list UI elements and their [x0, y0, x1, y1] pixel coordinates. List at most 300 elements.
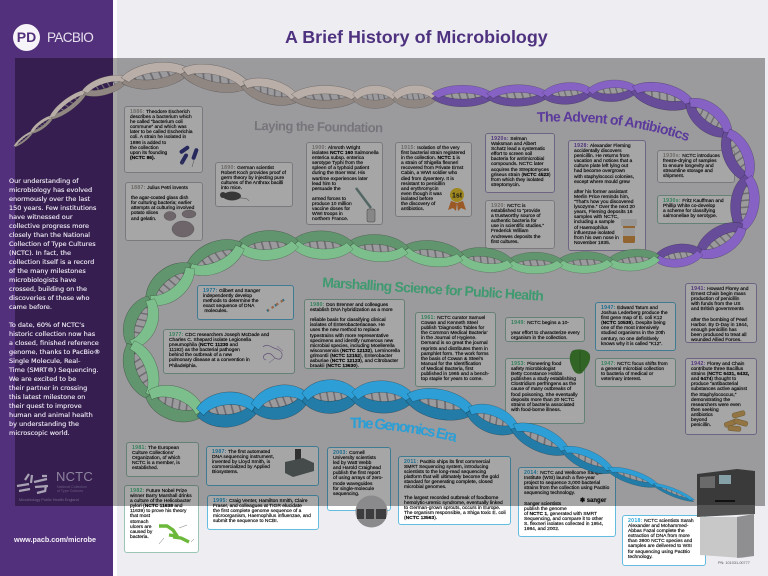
card: 1928 Fleming: penicillin. He returns from	[574, 154, 629, 159]
card: 1995 Venter: submit the sequence to NCBI.	[213, 519, 278, 524]
card: 1961 Cowan and Steel: the basis of Cowan & Steel’s	[421, 357, 483, 362]
logo: NCTC: National Collection	[57, 485, 87, 489]
card: 1982 Marshall: caused by	[130, 530, 152, 535]
card: 1920s Waksman: Waksman and Albert	[491, 142, 536, 147]
intro paragraph: Our understanding of	[9, 176, 79, 184]
card: 2014 Sanger: Institute (WSI) launch a five-year	[524, 476, 595, 481]
card: 1890 Koch: into mice.	[221, 186, 242, 191]
card: 1977 Gilbert and Sanger	[197, 285, 294, 320]
card: 1977 CDC Legionella: 1977: CDC researchers Joseph McDade and	[169, 332, 269, 338]
card: 1941 Florey and Chain: Ernest Chain begin mass	[691, 292, 746, 297]
card: 1900 Wright: armed forces to	[312, 197, 346, 202]
card: 1947 Tatum and Lederberg: first gene map of E. coli K12	[601, 316, 662, 321]
card: 1900 Wright: WWI troops in	[312, 212, 343, 217]
card: 1900 Wright: vaccine doses for	[312, 207, 350, 212]
card: 1915 first strain	[395, 142, 472, 217]
card: 2011 PacBio: SMRT Sequencing system, introducing	[404, 465, 488, 470]
card: 1947 Tatum and Lederberg: 1947: Edward Tatum and	[601, 305, 658, 311]
card: 1915 first strain: a strain of Shigella flexneri	[401, 161, 458, 166]
icon: zero-mode waveguide circle	[356, 496, 388, 528]
card: 2003 Craighead: and Harold Craighead	[333, 466, 381, 471]
card: 1890 Koch: germ theory by injecting pure	[221, 176, 284, 181]
card: 1928 Fleming: of Haemophilus	[574, 226, 608, 230]
card: 1886 Escherich: (NCTC 86).	[130, 156, 155, 161]
card: 1928 Fleming: except where mould grew	[574, 180, 630, 185]
card: 1915 first strain: antibiotics.	[401, 207, 424, 212]
logo: PacBio	[13, 24, 94, 51]
card: 1961 Cowan and Steel: reprints and distributes them in	[421, 347, 488, 352]
card: 1900 Wright: during the Boer War. His	[312, 171, 365, 176]
card: 1920s Waksman: from which they isolated	[491, 178, 543, 183]
card: 1947 Tatum and Lederberg	[595, 302, 676, 351]
card: 1987 instrument: commercialized by Applied	[212, 465, 270, 470]
card: 1980 Brenner	[304, 299, 405, 369]
card: 1995 Venter: microorganism, Haemophilus influenzae, and	[213, 514, 311, 519]
intro paragraph: have witnessed our	[9, 212, 73, 220]
card: 1930s Kauffman: 1930s: Fritz Kauffman and	[663, 198, 724, 204]
card: 1930 NCTC established: use in scientific studies.”	[491, 224, 544, 229]
card: 1928 Fleming: vacation and notices that a	[574, 159, 632, 164]
card: 1987 instrument: DNA sequencing instrument,	[212, 455, 274, 460]
card: 1886 Escherich: upon its founding	[130, 151, 167, 156]
card: 1930s freeze-drying: shipment.	[663, 174, 684, 179]
card: 1886 Escherich	[124, 106, 203, 173]
card: 2018: for sequencing using PacBio	[628, 550, 690, 555]
card: 2014 Sanger: S. flexneri isolates collected in 1954,	[524, 522, 603, 527]
card: 1947 Tatum and Lederberg: Joshua Lederberg produce the	[601, 311, 668, 316]
card: 1961 Cowan and Steel: Cowan and Kenneth Steel	[421, 321, 478, 326]
card: 1947 Tatum and Lederberg: studied organisms in the 20th	[601, 331, 665, 336]
card: 1928 Fleming: from his own nose in	[574, 236, 619, 241]
heading: Marshalling Science for Public Health: Marshalling Science for Public Health	[322, 278, 543, 301]
card: 1942 Florey and Chain: substances active against	[691, 387, 747, 392]
card: 2014 Sanger: Sequencing, and compare it to other	[524, 517, 603, 522]
icon: pill bottle	[621, 219, 637, 243]
card: 1949: year effort to characterize every	[511, 331, 580, 336]
card: 1941 Florey and Chain: wounded Allied Forces.	[691, 338, 742, 343]
card: 1930s freeze-drying: 1930s: NCTC introduces	[663, 153, 720, 159]
card: 1980 Brenner: uses the new method to replace	[310, 328, 379, 333]
card: 2014 Sanger: Sanger scientists	[524, 502, 561, 507]
card: 1915 first strain: Cabin, a WWI soldier who	[401, 171, 457, 176]
card: 1941 Florey and Chain: 1941: Howard Florey and	[691, 286, 748, 292]
card: 1942 Florey and Chain	[685, 358, 757, 435]
card: 1928 Fleming: lysozyme.” Over the next 20	[574, 205, 635, 210]
card: 1987 instrument	[206, 446, 319, 486]
card: 1890 Koch: cultures of the Anthrax bacilli	[221, 181, 283, 186]
icon: first place medal: 1st	[452, 192, 463, 200]
intro paragraph: enormously over the last	[9, 194, 90, 202]
card: 1947 NCTC focus	[595, 358, 676, 387]
intro paragraph	[9, 176, 96, 310]
card: 2014 Sanger: sequencing technology.	[524, 491, 575, 496]
card: 1930s freeze-drying: to ensure longevity and	[663, 164, 714, 169]
card: 1915 first strain: 1915: Isolation of the very	[401, 145, 460, 151]
second paragraph: Single Molecule, Real-	[9, 357, 80, 365]
card: 1982 Marshall: bacteria.	[130, 535, 149, 540]
card: 1980 Brenner: grimontii (NCTC 12152), Enterobacter	[310, 354, 392, 359]
card: 1930 NCTC established: first cultures.	[491, 240, 519, 245]
card: 1961 Cowan and Steel: published in 1965 and a bench-	[421, 372, 489, 377]
card: 1980 Brenner: braakii (NCTC 13630).	[310, 364, 359, 369]
card: 1900 Wright: wartime experiences later	[312, 177, 368, 182]
card: 1953 Hobbs: safety microbiologist	[511, 367, 555, 372]
logo: NCTC	[16, 469, 93, 502]
card: 2003 Craighead: 2003: Cornell	[333, 450, 365, 456]
card: 1961 Cowan and Steel: in the Journal of Hygiene.	[421, 336, 476, 341]
card: 2003 Craighead: sequencing.	[333, 492, 359, 497]
logo: PacBio: PD	[17, 29, 36, 45]
card: 1928 Fleming	[568, 140, 646, 251]
card: 1930 NCTC established: Andrewes deposits the	[491, 235, 540, 240]
card: 1930s Kauffman: Phillip White co-develop	[663, 204, 715, 209]
card: 1930s freeze-drying: streamline storage and	[663, 169, 713, 174]
card: 1900 Wright: isolates NCTC 160 Salmonella	[312, 151, 379, 156]
second paragraph: their quest to improve	[9, 402, 82, 410]
card: 1949	[505, 317, 585, 342]
card: 1928 Fleming: after his former assistant	[574, 190, 628, 195]
left purple panel	[0, 0, 113, 576]
intro paragraph: came before.	[9, 302, 52, 310]
card: 1947 Tatum and Lederberg: knows why it is called “K12”.	[601, 342, 662, 347]
card: 2014 Sanger: 2014: NCTC and Wellcome Sanger	[524, 470, 603, 476]
card: 1980 Brenner: establish DNA hybridization as a more	[310, 308, 393, 313]
card: 1890 Koch	[215, 162, 293, 207]
card: 1890 Koch: 1890: German scientist	[221, 165, 274, 171]
intro paragraph: 150 years. Few institutions	[9, 204, 96, 212]
icon: spinach leaf	[570, 349, 590, 374]
second paragraph: their partner in crossing	[9, 384, 87, 392]
card: 1953 Hobbs: deposits more than 20 NCTC	[511, 398, 574, 403]
intro paragraph: (NCTC). In fact, the	[9, 248, 71, 256]
card: 1953 Hobbs: Betty Constance Hobbs	[511, 372, 562, 377]
second paragraph: microscopic world.	[9, 429, 70, 437]
dimming overlay rectangle	[14, 58, 764, 506]
card: 1886 Escherich: commune” and which was	[130, 125, 187, 130]
card: 1928 Fleming: “That’s how you discovered	[574, 200, 633, 205]
icon: petri dishes	[164, 210, 196, 238]
intro paragraph: of the many milestones	[9, 266, 86, 274]
card: 1928 Fleming: accidentally discovers	[574, 149, 622, 154]
card: 1947 Tatum and Lederberg: (NCTC 10538). Despite being	[601, 321, 665, 326]
card: 1941 Florey and Chain: enough penicillin has	[691, 328, 737, 333]
intro paragraph: discoveries of those who	[9, 294, 90, 302]
card: 2018: than 3800 NCTC species and	[628, 539, 692, 544]
icon: DNA bases	[266, 298, 285, 312]
card: 2018: extraction of DNA from more	[628, 534, 690, 539]
card: 1920s Waksman: acquires the Streptomyces	[491, 168, 549, 173]
card: 1886 Escherich: coli. A strain he isolated in	[130, 135, 186, 140]
card: 1987 instrument: Biosystems.	[212, 470, 238, 475]
second paragraph: a closed, finished reference	[9, 339, 99, 347]
card: 1928 Fleming: had become overgrown	[574, 169, 625, 174]
card: 1928 Fleming: 1928: Alexander Fleming	[574, 143, 631, 149]
card: 1980 Brenner: typestrains with more representative	[310, 334, 389, 339]
card: 1980 Brenner: isolates of Enterobacteriaceae. He	[310, 323, 385, 328]
logo: NCTC: NCTC	[56, 469, 93, 484]
card: 1980 Brenner: 1980: Don Brenner and colleagues	[310, 302, 388, 308]
icon: sequencing instrument	[285, 449, 314, 477]
card: 1977 CDC Legionella: 11192) as the bacterial pathogen	[169, 348, 240, 353]
card: 1928 Fleming: culture plate left lying out	[574, 164, 628, 169]
icon: syringe and vial	[355, 187, 376, 222]
card: 2014 Sanger: of NCTC 1, generated with SMRT	[524, 512, 597, 517]
card: 2014 Sanger: 1984, and 2002.	[524, 527, 559, 532]
card: 1987 instrument: invented by Lloyd Smith, is	[212, 460, 270, 465]
card: 1980 Brenner: microbial species, including Moellerella	[310, 344, 395, 349]
card: 1980 Brenner: asburiae (NCTC 12123), and Citrobacter	[310, 359, 398, 364]
card: 2003 Craighead: of using arrays of zero-	[333, 476, 383, 481]
second paragraph: historic collection now has	[9, 330, 95, 338]
card: 1886 Escherich: describes a bacterium which	[130, 115, 192, 120]
icon: bacillus rods	[724, 410, 748, 432]
title: A Brief History of Microbiology	[285, 27, 548, 47]
card: 1941 Florey and Chain: production of penicillin	[691, 297, 739, 302]
card: 2018: Alexander and Mohammed-	[628, 524, 688, 529]
card: 2003 Craighead: mode waveguides	[333, 482, 372, 487]
second paragraph: To date, 60% of NCTC’s	[9, 321, 85, 329]
helix: purple antibiotics strand	[432, 77, 762, 270]
card: 2014 Sanger: project to sequence 3,000 bacterial	[524, 481, 600, 486]
card: 1886 Escherich: 1886: Theodore Escherich	[130, 109, 190, 115]
card: 1942 Florey and Chain: the Staphylococcus,”	[691, 393, 736, 398]
card: 1930 NCTC established: 1920: NCTC is	[491, 203, 526, 209]
card: 1920s Waksman: effort to screen soil	[491, 152, 532, 157]
intro paragraph: Collection of Type Cultures	[9, 240, 96, 248]
card: 2011 PacBio: hemolytic-uremic syndrome, eventually linked	[404, 501, 503, 506]
card: 1981 ECCO: Culture Collections’	[132, 451, 174, 456]
card: 1953 Hobbs: cause of many outbreaks of	[511, 387, 571, 392]
card: 2018: 2018: NCTC scientists Sarah	[628, 518, 694, 524]
card: 1953 Hobbs: strains of bacteria associated	[511, 403, 574, 408]
helix: green public health strand	[116, 229, 661, 429]
second paragraph: by understanding the	[9, 420, 79, 428]
card: 1942 Florey and Chain: and 6474) thought to	[691, 377, 736, 382]
card: 1949: 1949: NCTC begins a 10-	[511, 320, 569, 326]
icon: final sequencing instrument	[697, 469, 755, 558]
card: 1953 Hobbs: publishes a study establishing	[511, 377, 576, 382]
card: 1930 NCTC established: Frederick William	[491, 229, 528, 234]
card: 1930s Kauffman: salmonellae by serotype.	[663, 214, 717, 219]
card: 1928 Fleming: November 1935.	[574, 241, 610, 246]
card: 1915 first strain: recovered from Private Ernst	[401, 166, 463, 171]
card: 1915 first strain: resistant to penicillin	[401, 182, 445, 187]
card: 1941 Florey and Chain: and British governments	[691, 307, 744, 312]
helix: blue genomics strand	[195, 379, 696, 505]
card: 1977 Gilbert and Sanger: independently develop	[203, 294, 252, 299]
card: 2011 PacBio: microbial genomes.	[404, 485, 446, 490]
card: 1941 Florey and Chain: been produced to treat all	[691, 333, 746, 338]
second paragraph	[8, 321, 100, 437]
card: 1981 ECCO: NCTC is a member, is	[132, 461, 180, 466]
card: 1981 ECCO: 1981: The European	[132, 445, 179, 451]
logo: NCTC: Microbiology Public Health England	[19, 498, 79, 502]
card: 1947 NCTC focus: to bacteria of medical or	[601, 372, 653, 377]
card: 1930 NCTC established	[485, 200, 555, 249]
card: 1886 Escherich: later to be called Escherichia	[130, 130, 193, 135]
card: 1977 CDC Legionella: pneumophila (NCTC 11230 and	[169, 343, 238, 348]
card: 1915 first strain: in the collection. NCTC 1 is	[401, 156, 460, 161]
card: 1886 Escherich: he called “bacterium coli	[130, 120, 183, 125]
card: 1947 NCTC focus: veterinary interest.	[601, 377, 641, 382]
card: 1942 Florey and Chain: researchers were even	[691, 403, 741, 408]
card: 1949: organism in the collection.	[511, 336, 568, 341]
card: 1953 Hobbs	[505, 358, 585, 424]
card: 1920s Waksman: streptomycin.	[491, 183, 520, 188]
card: 1961 Cowan and Steel: publish ‘Diagnostic Tables for	[421, 326, 484, 331]
card: 1982 Marshall: winner Barry Marshall drinks	[130, 494, 192, 499]
card: 1947 NCTC focus: a general microbial collection	[601, 367, 664, 372]
card: 1981 ECCO: established.	[132, 466, 158, 471]
intro paragraph: closely than the National	[9, 230, 90, 238]
card: 1977 Gilbert and Sanger: methods to determine the	[203, 299, 258, 304]
card: 1977 CDC Legionella: behind the outbreak of a new	[169, 353, 232, 358]
card: 1980 Brenner: wisconsensis (NCTC 12132), Leminorella	[310, 349, 400, 354]
card: 1900 Wright: produce 10 million	[312, 202, 352, 207]
card: 1942 Florey and Chain: beyond	[691, 418, 707, 423]
card: 1942 Florey and Chain: contribute three Bacillus	[691, 367, 743, 372]
heading: Laying the Foundation: Laying the Foundation	[254, 118, 383, 135]
logo: NCTC: of Type Cultures	[57, 489, 83, 493]
card: 1915 first strain: and erythromycin	[401, 187, 439, 192]
card: 1961 Cowan and Steel: the Common Medical Bacteria’	[421, 331, 488, 336]
card: 1982 Marshall: stomach	[130, 520, 148, 525]
card: 1977 Gilbert and Sanger: 1977: Gilbert and Sanger	[203, 288, 260, 294]
card: 1930 NCTC established: a trustworthy source of	[491, 214, 540, 219]
card: 1995 Venter: the first complete genome sequence of a	[213, 509, 301, 514]
card: 2011 PacBio	[398, 456, 511, 525]
card: 1980 Brenner: reliable basis for classifying clinical	[310, 318, 386, 323]
card: 1977 CDC Legionella: Philadelphia.	[169, 364, 197, 369]
card: 1887 Petri: attempts at culturing involved	[131, 206, 194, 211]
card: 1942 Florey and Chain: demonstrating the	[691, 398, 730, 403]
card: 1900 Wright: spleen of a typhoid patient	[312, 166, 369, 171]
card: 1928 Fleming: samples with NCTC,	[574, 215, 619, 220]
card: 2014 Sanger	[518, 467, 616, 537]
card: 1886 Escherich: the collection	[130, 146, 159, 151]
icon: Legionella bacteria	[262, 344, 283, 363]
card: 1942 Florey and Chain: produce “antibacterial	[691, 382, 738, 387]
helix: beige foundation strand	[12, 58, 438, 149]
intro paragraph: collective progress more	[9, 222, 89, 230]
card: 1941 Florey and Chain	[685, 283, 757, 343]
card: 2018: technology.	[628, 555, 653, 560]
card: 1982 Marshall: pylori (NCTC 11638 and	[130, 504, 182, 509]
card: 1942 Florey and Chain: 1942: Florey and Chain	[691, 361, 744, 367]
card: 1920s Waksman: 1920s: Selman	[491, 136, 527, 142]
card: 2003 Craighead: University scientists	[333, 456, 376, 461]
card: 1887 Petri: potato slices	[131, 211, 158, 216]
card: 1953 Hobbs: food poisoning. She eventually	[511, 393, 578, 398]
heading: The Advent of Antibiotics: The Advent of Antibiotics	[536, 111, 689, 140]
second paragraph: this latest milestone on	[9, 393, 85, 401]
card: 1887 Petri: for culturing bacteria; earlier	[131, 201, 192, 206]
card: 1987 instrument: 1987: The first automated	[212, 449, 270, 455]
card: 1928 Fleming: with staphylococci colonies,	[574, 175, 634, 180]
card: 2003 Craighead: led by Watt Webb	[333, 461, 371, 466]
card: 1961 Cowan and Steel: top staple for years to come.	[421, 377, 483, 382]
card: 1982 Marshall: 11639) to prove his theory	[130, 509, 186, 514]
card: 1982 Marshall: that most	[130, 514, 150, 519]
card: 1980 Brenner: specimens and identify numerous new	[310, 339, 393, 344]
card: 1915 first strain: isolated before	[401, 197, 433, 202]
website url: www.pacb.com/microbe	[14, 535, 96, 544]
card: 1920s Waksman: griseus strain (NCTC 4523)	[491, 173, 551, 178]
card: 1942 Florey and Chain: then seeking	[691, 408, 719, 413]
card: 2011 PacBio: standard for generating complete, closed	[404, 480, 493, 485]
card: 1900 Wright: serotype Typhi from the	[312, 161, 363, 166]
second paragraph: human and animal health	[9, 411, 93, 419]
card: 2018: Abbas Fazal complete the	[628, 529, 685, 534]
card: 1920s Waksman: Schatz lead a systematic	[491, 147, 545, 152]
card: 2011 PacBio: 2011: PacBio ships its first commercial	[404, 459, 490, 465]
card: 2011 PacBio: to German-grown sprouts, occurs in Europe.	[404, 506, 500, 511]
card: 1977 Gilbert and Sanger: molecules.	[204, 309, 228, 314]
second paragraph: We are excited to be	[9, 375, 76, 383]
card: 2011 PacBio: (NCTC 13563).	[404, 516, 437, 521]
card: 1961 Cowan and Steel: of Medical Bacteria, first	[421, 367, 473, 372]
card: 1928 Fleming: influenzae isolated	[574, 231, 615, 236]
card: 1900 Wright	[306, 142, 383, 225]
card: 1995 Venter: Fraser, and colleagues at TIGR elucidate	[213, 504, 302, 509]
card: 2003 Craighead: for single-molecule	[333, 487, 374, 492]
part number: PN: 101031-00777	[718, 561, 750, 565]
card: 2018	[622, 515, 706, 566]
card: 1977 Gilbert and Sanger: exact sequence of DNA	[203, 304, 254, 309]
card: 1930s freeze-drying	[657, 150, 735, 183]
card: 1900 Wright: lead him to	[312, 182, 336, 187]
card: 1982 Marshall: 1982: Future Nobel Prize	[130, 488, 187, 494]
card: 1928 Fleming: Merlin Price reminds him,	[574, 195, 629, 200]
card: 1982 Marshall	[124, 485, 199, 553]
card: 1961 Cowan and Steel: pamphlet form. The work forms	[421, 352, 489, 357]
card: 1977 CDC Legionella: Charles C. Shepard isolate Legionella	[169, 338, 251, 343]
card: 1953 Hobbs: 1953: Pioneering food	[511, 361, 561, 367]
card: 2003 Craighead	[327, 447, 391, 511]
card: 1930 NCTC established: established to “provide	[491, 209, 540, 214]
card: 1977 CDC Legionella	[163, 329, 295, 374]
card: 2011 PacBio: scientists to the long-read sequencing	[404, 470, 486, 475]
card: 1961 Cowan and Steel	[415, 312, 496, 387]
card: 1961 Cowan and Steel: 1961: NCTC curator Samuel	[421, 315, 485, 321]
card: 1982 Marshall: ulcers are	[130, 525, 151, 530]
card: 1928 Fleming: years, Fleming deposits 16	[574, 210, 632, 215]
card: 1900 Wright: northern France.	[312, 217, 348, 222]
card: 1942 Florey and Chain: strains (NCTC 6431, 6432,	[691, 372, 749, 377]
card: 1961 Cowan and Steel: Demand is so great the journal	[421, 341, 488, 346]
card: 1953 Hobbs: with food-borne illness.	[511, 408, 561, 413]
card: 2011 PacBio: The largest recorded outbreak of foodborne	[404, 496, 498, 501]
card: 1887 Petri	[125, 182, 203, 241]
intro paragraph: microbiologists have	[9, 276, 76, 284]
card: 2003 Craighead: publish the first report	[333, 471, 380, 476]
card: 2011 PacBio: platform that will ultimately become the gold	[404, 475, 499, 480]
card: 1930s Kauffman: a scheme for classifying	[663, 209, 715, 214]
card: 1947 NCTC focus: 1947: NCTC focus shifts from	[601, 361, 668, 367]
card: 2011 PacBio: The organism responsible, a Shiga toxic E. coli	[404, 511, 506, 516]
card: 1900 Wright: enterica subsp. enterica	[312, 156, 364, 161]
card: 1930 NCTC established: authentic bacteria for	[491, 219, 537, 224]
second paragraph: genome, thanks to PacBio®	[9, 348, 100, 356]
card: 2014 Sanger: publish the genome	[524, 507, 567, 512]
card: 1886 Escherich: 1886 is added to	[130, 141, 166, 146]
card: 2014 Sanger: strains from the collection using PacBio	[524, 486, 609, 491]
card: 1947 Tatum and Lederberg: century, no one definitively	[601, 337, 659, 342]
logo: PacBio: PACBIO	[47, 30, 93, 45]
card: 1953 Hobbs: Clostridium perfringens as the	[511, 382, 576, 387]
card: 1941 Florey and Chain: with funds from the US	[691, 302, 740, 307]
card: 1928 Fleming: including a sample	[574, 220, 615, 225]
